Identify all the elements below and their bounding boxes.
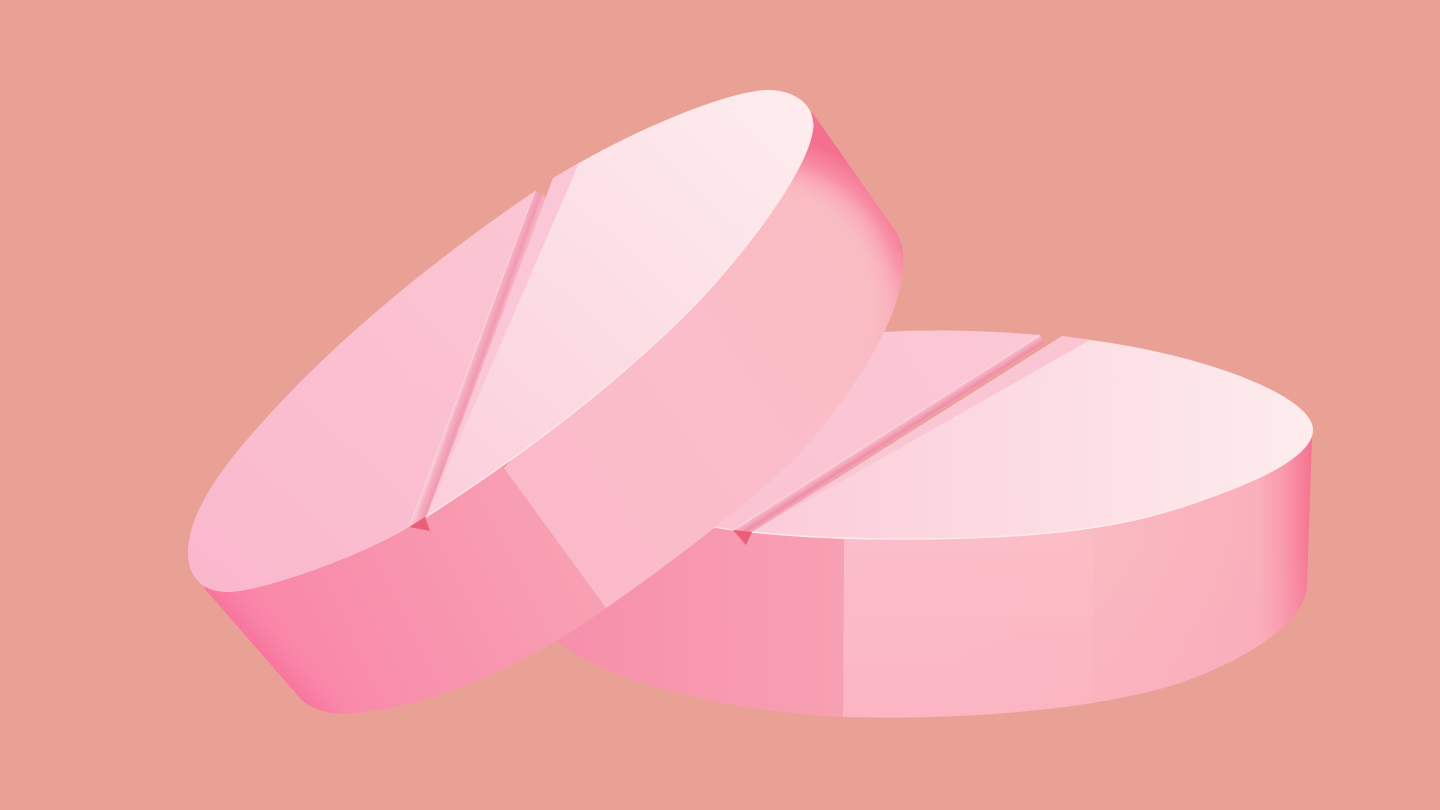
score groove bbox=[409, 191, 546, 527]
tablet side wall: right edge shade bbox=[792, 112, 904, 320]
tablet side wall: right section bbox=[1092, 436, 1312, 703]
tablet top face: right half bbox=[426, 90, 813, 517]
top face highlight rim bbox=[752, 468, 1275, 539]
tablet top face: left half bbox=[700, 331, 1040, 535]
tablet top face: right half bevel bbox=[426, 162, 580, 517]
back tablet bbox=[540, 331, 1323, 730]
top face highlight rim bbox=[426, 123, 813, 517]
groove notch bbox=[409, 517, 430, 531]
tablet top face: right half bbox=[752, 340, 1313, 539]
tablet side wall: middle section bbox=[843, 528, 1094, 718]
tablet side wall: soft edge bbox=[204, 468, 606, 714]
tablet side wall: shaded section bbox=[204, 468, 606, 714]
tablet side wall: shaded section bbox=[556, 486, 844, 717]
groove edge highlight bbox=[409, 191, 535, 527]
tablet top face: right half bevel bbox=[752, 336, 1092, 534]
illustration: two pink scored tablets bbox=[188, 90, 1313, 718]
tablet top face: left half bbox=[188, 191, 535, 592]
front tilted tablet bbox=[188, 90, 910, 714]
tablet side wall: lower shading bbox=[844, 713, 1000, 718]
tablet side wall: upper panel bbox=[884, 316, 892, 331]
groove edge highlight bbox=[733, 335, 1040, 530]
score groove bbox=[733, 335, 1044, 532]
tablet side wall: lit section bbox=[504, 112, 904, 608]
groove notch bbox=[733, 530, 752, 545]
